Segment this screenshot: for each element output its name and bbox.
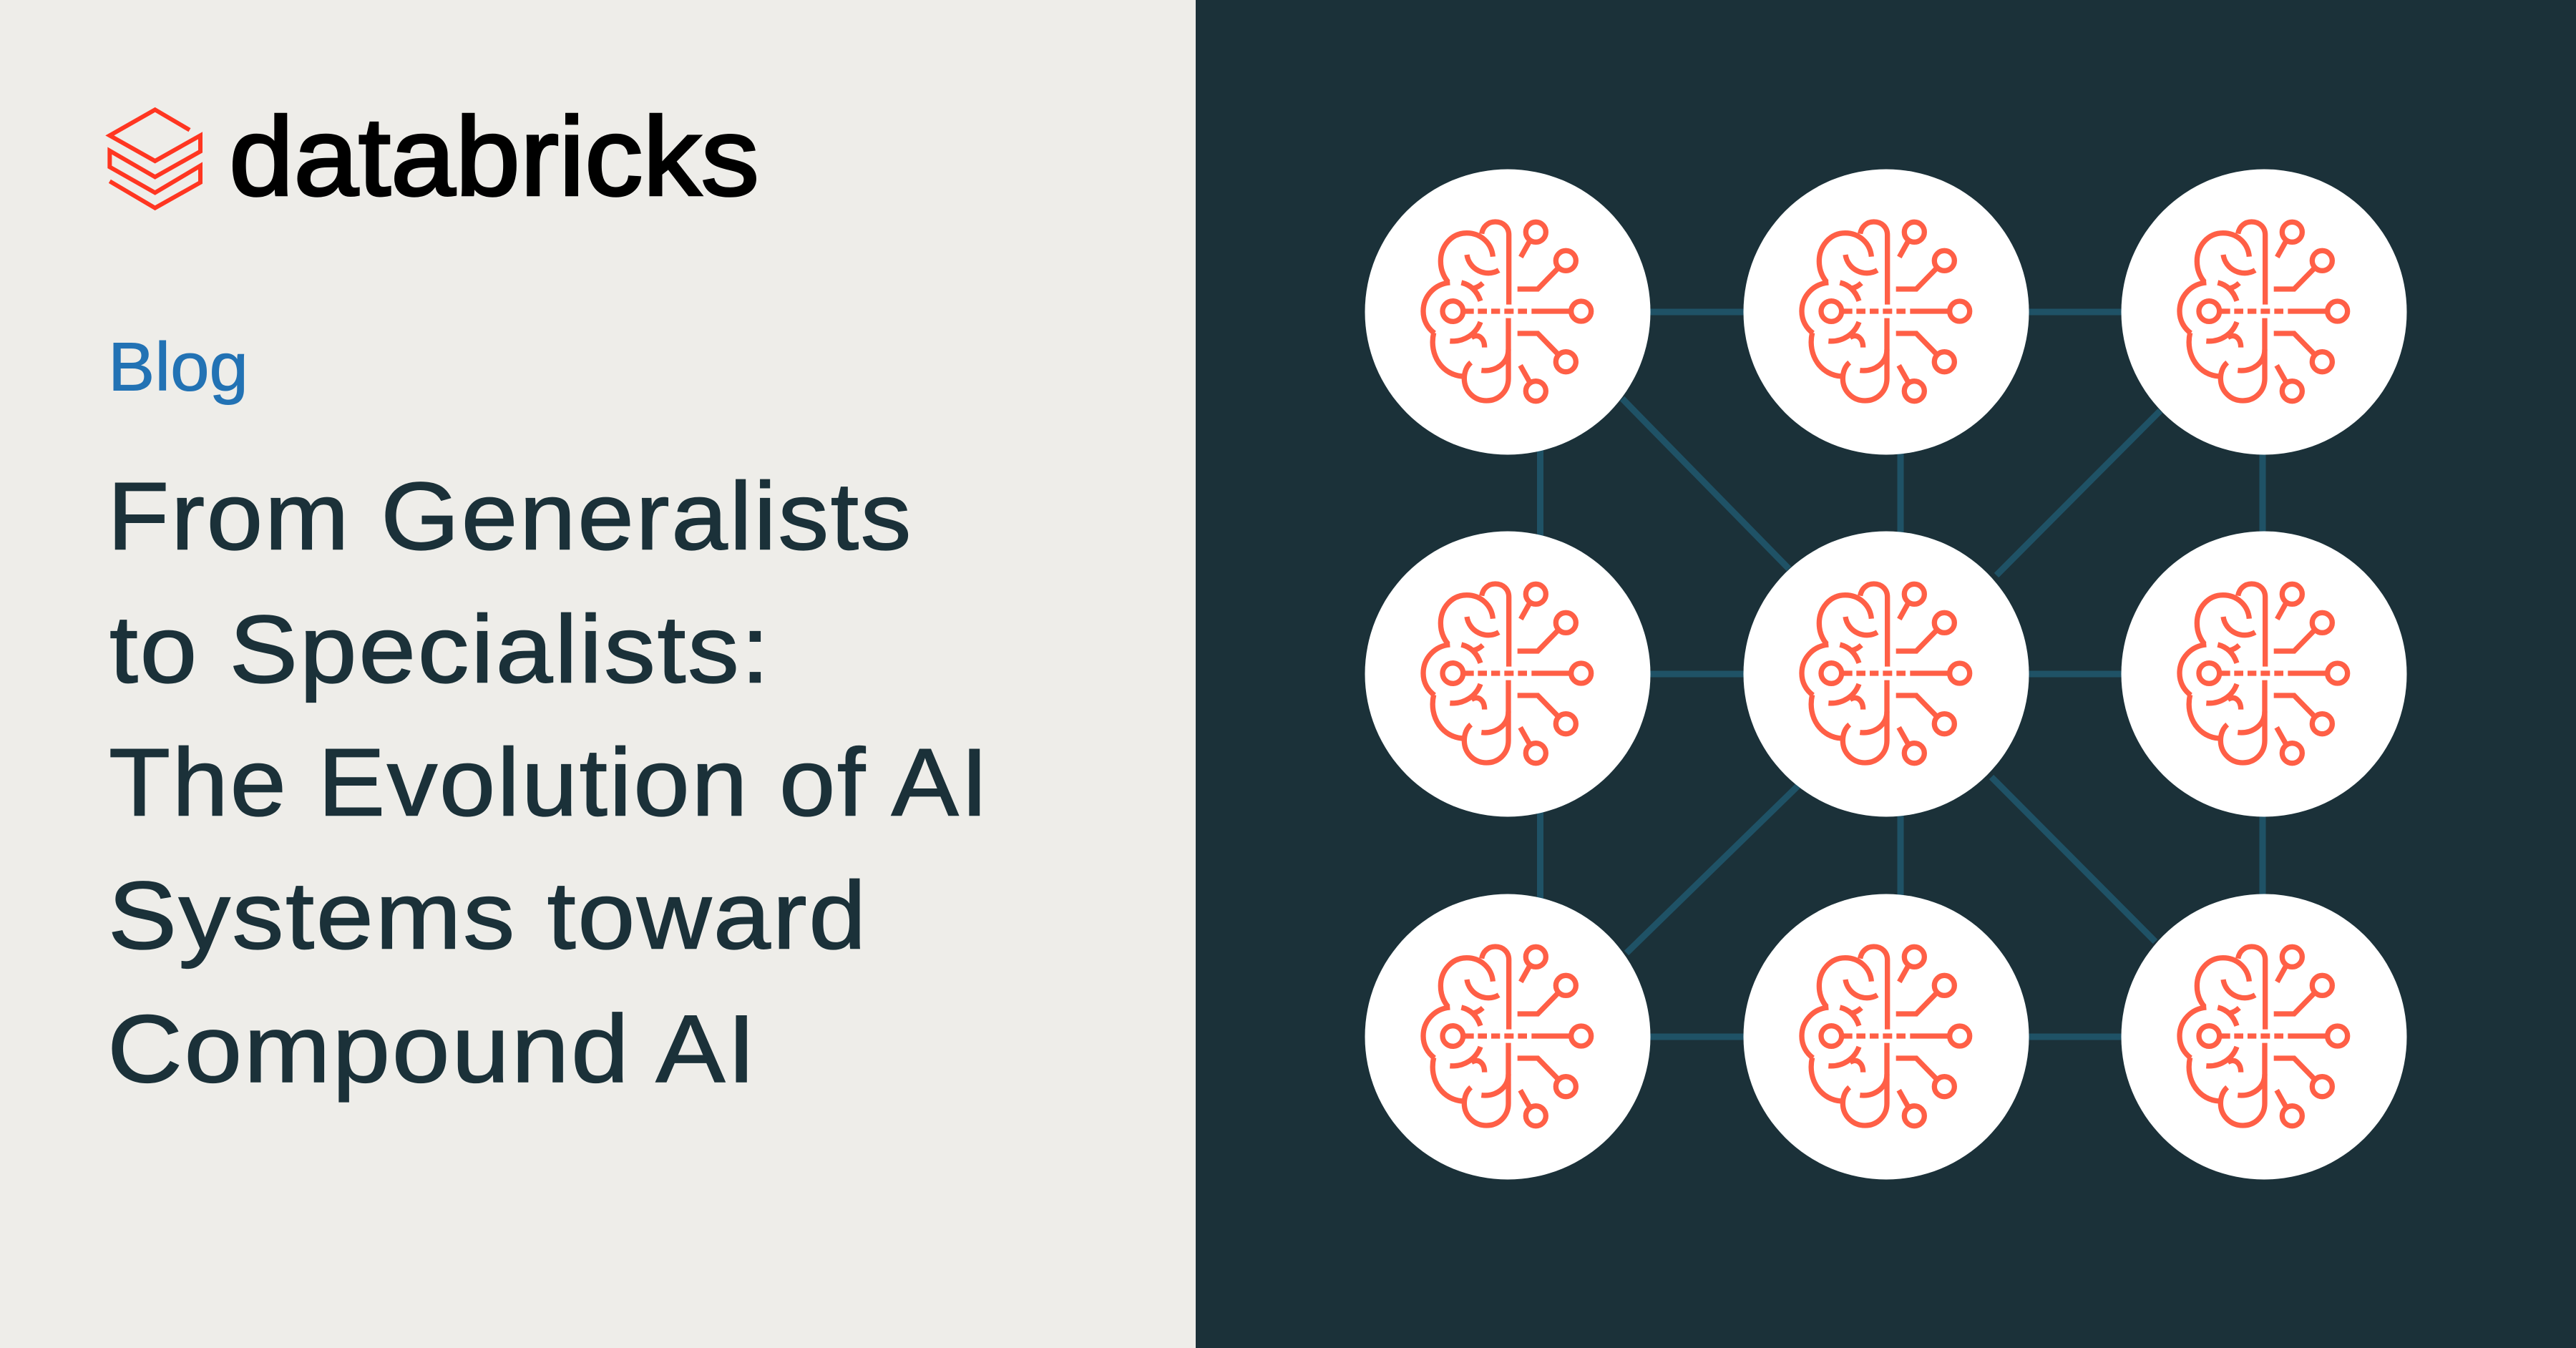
node: top centre [1743,169,2029,455]
node: top left [1365,169,1650,455]
title line 4: Systems toward [108,863,868,969]
logo wordmark: databricks [229,94,759,219]
node: middle right [2121,531,2407,817]
node: middle left [1365,531,1650,817]
panel: right dark background [1196,0,2576,1348]
icon: databricks stacked layers [109,109,200,208]
network connector lines [1508,312,2264,1037]
node: bottom right [2121,894,2407,1179]
title line 5: Compound AI [107,996,758,1103]
category label: Blog: Blog [108,329,248,405]
panel: left background [0,0,1196,1348]
node: bottom centre [1743,894,2029,1179]
node: centre [1743,531,2029,817]
node: bottom left [1365,894,1650,1179]
title [107,464,990,1103]
logo: databricks [109,94,759,219]
title line 2: to Specialists: [109,597,771,703]
node: top right [2121,169,2407,455]
title line 3: The Evolution of AI [109,730,990,836]
title line 1: From Generalists [107,464,913,570]
